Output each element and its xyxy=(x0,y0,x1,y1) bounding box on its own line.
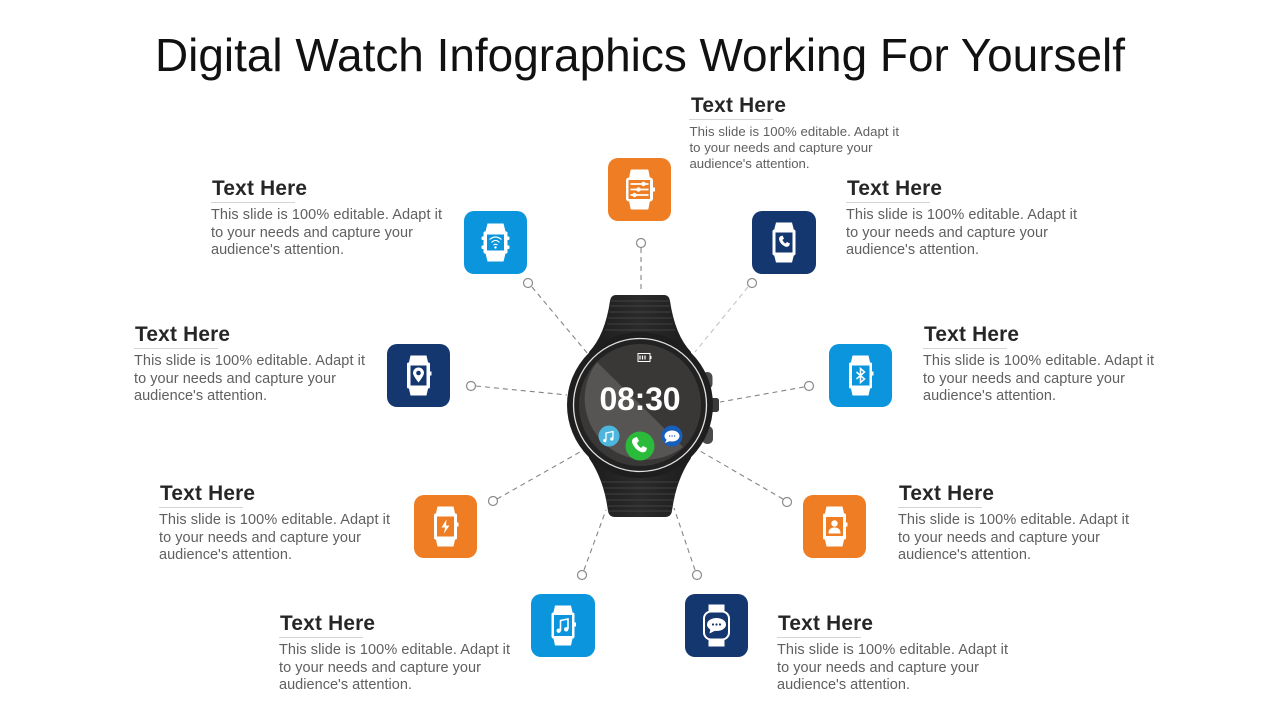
icon tile: music watch (blue) xyxy=(531,594,595,657)
text block: bottom left xyxy=(279,612,510,693)
icon tile: chat watch (navy) xyxy=(685,594,748,657)
phone app icon xyxy=(626,432,654,460)
text block: lower left: audience's attention. xyxy=(159,547,292,563)
icon tile: phone watch (navy) xyxy=(752,211,816,274)
title: Digital Watch Infographics Working For Yourself xyxy=(155,29,1125,81)
text block: top: audience's attention. xyxy=(690,156,810,171)
text block: bottom right: to your needs and capture your xyxy=(777,660,979,676)
text block: right: audience's attention. xyxy=(923,388,1056,404)
text block: left: to your needs and capture your xyxy=(134,371,336,387)
connector: top xyxy=(636,238,646,293)
text block: lower right: audience's attention. xyxy=(898,547,1031,563)
text block: right: to your needs and capture your xyxy=(923,371,1125,387)
text block: bottom left: to your needs and capture your xyxy=(279,660,481,676)
text block: left: This slide is 100% editable. Adapt it xyxy=(134,353,365,369)
text block: lower right: to your needs and capture your xyxy=(898,530,1100,546)
connector: bottom right xyxy=(674,508,702,580)
music app icon xyxy=(598,426,620,446)
text block: upper left: Text Here xyxy=(212,177,307,200)
watch bezel xyxy=(567,332,713,478)
text block: upper right: This slide is 100% editable. Adapt it xyxy=(846,207,1077,223)
text block: left xyxy=(134,323,365,404)
text block: upper right: Text Here xyxy=(847,177,942,200)
text block: lower left: Text Here xyxy=(160,482,255,505)
text block: upper right: audience's attention. xyxy=(846,242,979,258)
text block: top: This slide is 100% editable. Adapt it xyxy=(690,124,899,139)
text block: right xyxy=(923,323,1154,404)
icon tile: charging watch (orange) xyxy=(414,495,477,558)
text block: lower left: This slide is 100% editable. Adapt it xyxy=(159,512,390,528)
text block: top xyxy=(689,94,899,171)
icon tile: location watch (navy) xyxy=(387,344,450,407)
text block: bottom left: audience's attention. xyxy=(279,677,412,693)
watch ring xyxy=(574,338,706,472)
text block: upper left: This slide is 100% editable. Adapt it xyxy=(211,207,442,223)
text block: upper left xyxy=(211,177,442,258)
text block: right: This slide is 100% editable. Adapt it xyxy=(923,353,1154,369)
text block: bottom left: This slide is 100% editable. Adapt it xyxy=(279,642,510,658)
text block: left: audience's attention. xyxy=(134,388,267,404)
side buttons xyxy=(702,372,719,444)
text block: lower right: Text Here xyxy=(899,482,994,505)
connector: upper right xyxy=(695,278,756,352)
time display: 08:30 xyxy=(600,381,680,417)
text block: upper right: to your needs and capture your xyxy=(846,225,1048,241)
text block: top: to your needs and capture your xyxy=(690,140,873,155)
connector: left xyxy=(466,382,567,395)
text block: bottom right: audience's attention. xyxy=(777,677,910,693)
message app icon xyxy=(662,426,682,446)
connector: upper left xyxy=(524,278,588,354)
text block: lower left: to your needs and capture your xyxy=(159,530,361,546)
text block: top: Text Here xyxy=(691,94,786,117)
text block: upper right xyxy=(846,177,1077,258)
text block: bottom left: Text Here xyxy=(280,612,375,635)
text block: right: Text Here xyxy=(924,323,1019,346)
icon tile: settings watch (orange) xyxy=(608,158,671,221)
text block: lower right xyxy=(898,482,1129,563)
watch screen xyxy=(579,344,701,466)
connector: lower left xyxy=(488,452,580,506)
text block: upper left: audience's attention. xyxy=(211,242,344,258)
central smartwatch xyxy=(567,295,719,517)
text block: upper left: to your needs and capture your xyxy=(211,225,413,241)
text block: bottom right: Text Here xyxy=(778,612,873,635)
text block: bottom right xyxy=(777,612,1008,693)
text block: left: Text Here xyxy=(135,323,230,346)
icon tile: contact watch (orange) xyxy=(803,495,866,558)
connector: right xyxy=(720,382,814,402)
watch strap xyxy=(589,295,691,517)
connector: lower right xyxy=(700,451,792,506)
text block: lower right: This slide is 100% editable. Adapt it xyxy=(898,512,1129,528)
icon tile: bluetooth watch (blue) xyxy=(829,344,892,407)
icon tile: wifi watch (blue) xyxy=(464,211,527,274)
text block: bottom right: This slide is 100% editable. Adapt it xyxy=(777,642,1008,658)
connector: bottom left xyxy=(578,510,606,580)
battery icon xyxy=(638,354,652,362)
text block: lower left xyxy=(159,482,390,563)
